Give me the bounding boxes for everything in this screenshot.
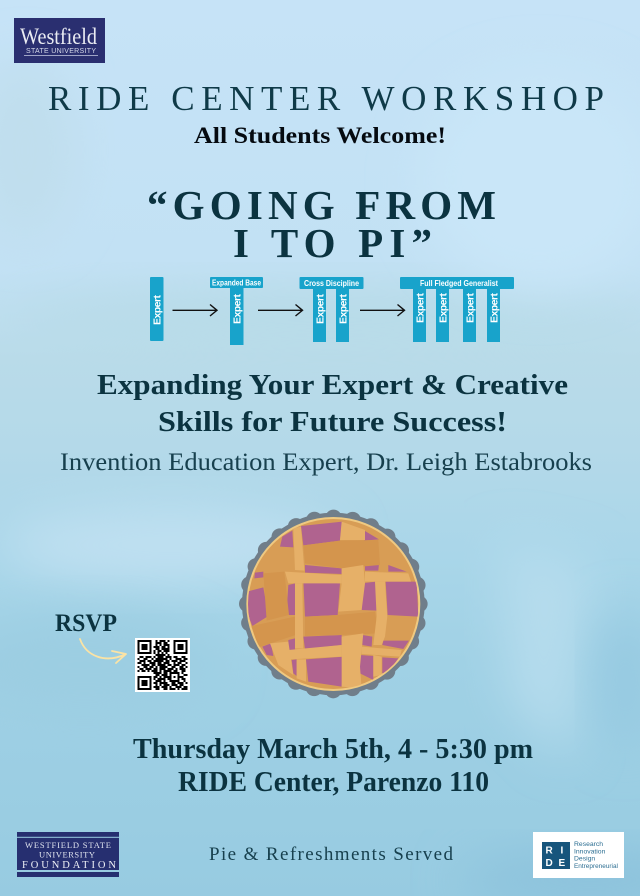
footer logo: RIDE <box>533 832 624 878</box>
stage: full fledged generalist <box>400 277 514 342</box>
pie tin <box>242 513 425 695</box>
logo: Westfield State University: STATE UNIVERSITY <box>26 48 96 55</box>
footer note: pie and refreshments: Pie & Refreshments Served <box>209 844 454 865</box>
footer logo: Westfield State University Foundation: UNIVERSITY <box>39 850 95 860</box>
arrow: RSVP to QR code <box>80 639 126 663</box>
stage: cross discipline <box>300 277 364 342</box>
stage: expanded base: Expanded Base <box>212 278 261 288</box>
footer logo: RIDE: I <box>560 846 564 856</box>
heading: RIDE Center Workshop: RIDE CENTER WORKSHOP <box>48 79 604 118</box>
stage: full fledged generalist: Full Fledged Generalist <box>420 279 498 288</box>
stage: expert bar <box>150 277 164 341</box>
footer logo: RIDE: Research <box>574 841 603 848</box>
footer logo: Westfield State University Foundation: FOUNDATION <box>22 860 116 871</box>
footer logo: RIDE: D <box>546 858 553 869</box>
RSVP label: RSVP <box>55 610 117 637</box>
presenter line: Invention Education Expert, Dr. Leigh Estabrooks <box>60 449 592 476</box>
subtitle: expanding your skills: Skills for Future Success! <box>158 406 507 438</box>
logo: Westfield State University: Westfield <box>20 24 97 49</box>
stage: full fledged generalist: Expert <box>464 292 476 323</box>
event location: RIDE Center, Parenzo 110 <box>178 767 489 798</box>
lattice filling and strips <box>247 522 418 688</box>
arrow: to cross discipline <box>258 304 302 316</box>
footer logo: RIDE: Innovation <box>574 848 606 856</box>
footer logo: RIDE: Entrepreneurial <box>574 863 618 870</box>
title: Going from I to Pi <box>147 182 496 266</box>
diagram: I to Pi skill progression <box>150 277 514 345</box>
stage: cross discipline: Cross Discipline <box>304 279 359 288</box>
stage: full fledged generalist: Expert <box>414 292 426 323</box>
event date and time: Thursday March 5th, 4 - 5:30 pm <box>133 734 533 765</box>
footer logo: Westfield State University Foundation: WESTFIELD STATE <box>25 840 111 850</box>
subtitle: expanding your skills <box>97 369 568 438</box>
stage: expert bar: Expert <box>152 294 164 325</box>
stage: cross discipline: Expert <box>338 294 350 324</box>
QR code <box>135 638 190 692</box>
footer logo: RIDE: E <box>558 858 566 869</box>
logo: Westfield State University <box>14 18 105 63</box>
stage: cross discipline: Expert <box>314 294 326 324</box>
footer logo: RIDE: R <box>546 846 554 856</box>
title: Going from I to Pi: I TO PI” <box>233 220 432 266</box>
stage: full fledged generalist: Expert <box>488 292 500 323</box>
arrow: to expanded base <box>172 304 217 316</box>
title: Going from I to Pi: “GOING FROM <box>147 182 496 228</box>
crust rim <box>247 518 419 690</box>
stage: full fledged generalist: Expert <box>438 292 450 323</box>
subheading: All Students Welcome: All Students Welcome! <box>194 123 446 148</box>
stage: expanded base: Expert <box>232 294 244 324</box>
footer logo: RIDE: Design <box>574 856 595 863</box>
stage: expanded base <box>210 277 263 345</box>
footer logo: Westfield State University Foundation <box>17 832 119 877</box>
arrow: to full fledged generalist <box>360 304 404 316</box>
illustration: lattice pie <box>242 513 425 695</box>
subtitle: expanding your skills: Expanding Your Expert & Creative <box>97 369 568 401</box>
